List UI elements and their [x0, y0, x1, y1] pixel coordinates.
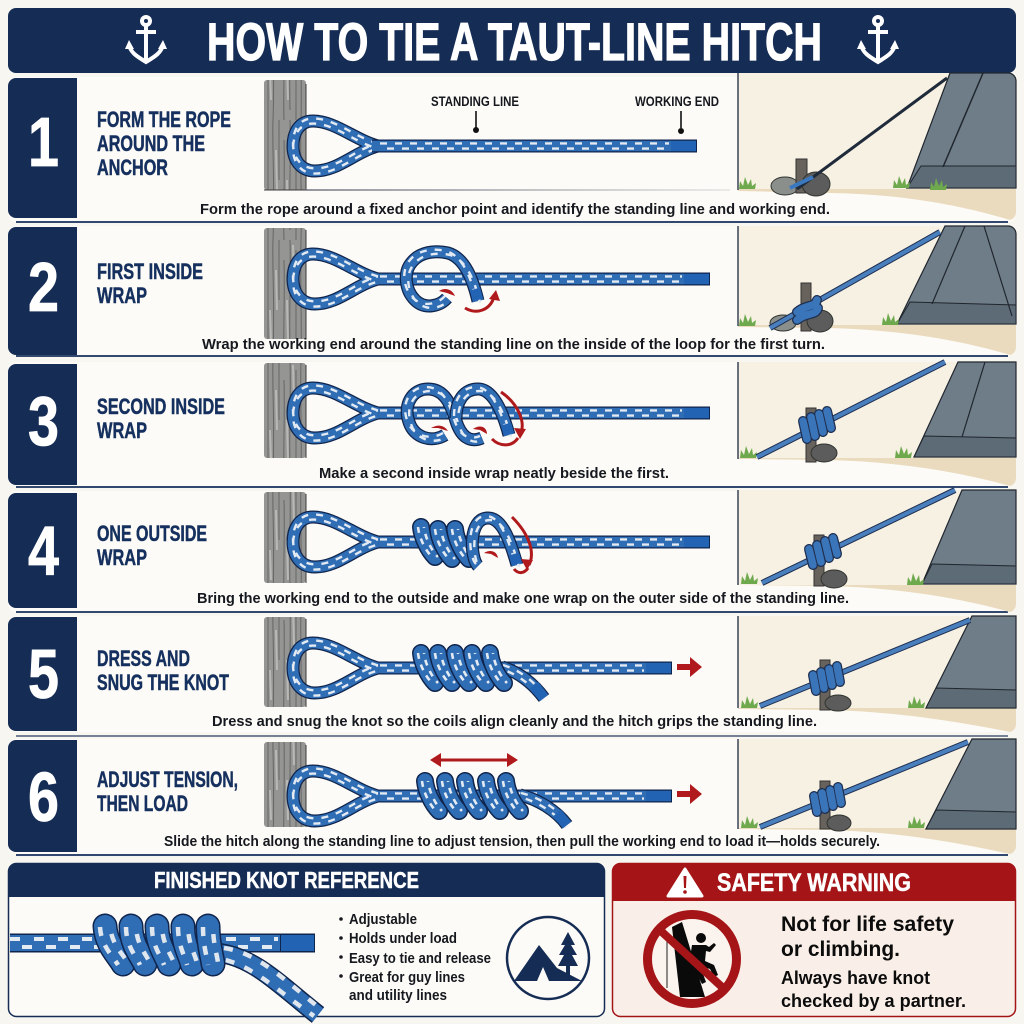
anchor post [264, 742, 306, 827]
step title: THEN LOAD [97, 791, 188, 816]
warning text: Always have knot [781, 967, 930, 988]
step number 6: 6 [28, 758, 59, 836]
label: standing line [431, 94, 519, 133]
step number 2 [8, 227, 77, 355]
panel: step 4 [8, 490, 1016, 612]
warning header [612, 863, 1016, 901]
label: standing line: STANDING LINE [431, 94, 519, 109]
step title [97, 394, 225, 443]
panel: step 5 [8, 616, 1016, 736]
panel: step 3 [8, 362, 1016, 487]
bullet list [339, 911, 491, 1004]
step title: WRAP [97, 418, 147, 443]
scene: tent guy line 5 [738, 616, 1016, 732]
caption: step 5: Dress and snug the knot so the coils align cleanly and the hitch grips the standing line. [212, 714, 817, 730]
step number 5 [8, 617, 77, 731]
caption: step 4: Bring the working end to the outside and make one wrap on the outer side of the standing line. [197, 591, 849, 607]
step number 3: 3 [28, 382, 59, 460]
step title [97, 107, 231, 180]
arrows: outside wrap direction [484, 517, 533, 573]
bullet list: Easy to tie and release [349, 950, 491, 967]
rope: finished knot [10, 925, 322, 1016]
step title [97, 767, 238, 816]
panel header: FINISHED KNOT REFERENCE [154, 867, 419, 893]
heading: main title: HOW TO TIE A TAUT-LINE HITCH [207, 13, 822, 72]
step title: ONE OUTSIDE [97, 521, 207, 546]
step title: SNUG THE KNOT [97, 670, 229, 695]
warning text: Not for life safety [781, 912, 954, 936]
step number 4: 4 [28, 512, 59, 590]
rope: step 4 [293, 514, 710, 570]
panel: step 6 [8, 739, 1016, 855]
rope: step 5 [293, 640, 672, 700]
anchor post [264, 363, 306, 458]
icon: left anchor [125, 17, 167, 62]
caption: step 3: Make a second inside wrap neatly beside the first. [319, 466, 669, 482]
anchor post [264, 492, 306, 583]
anchor post [264, 228, 306, 339]
icon: tent and tree [507, 917, 589, 999]
arrows: second wrap direction [431, 392, 526, 445]
panel: step 2 [8, 226, 1016, 356]
step number 6 [8, 740, 77, 852]
step title [97, 521, 207, 570]
step title: ADJUST TENSION, [97, 767, 238, 792]
panel header [8, 863, 605, 897]
icon: warning triangle [668, 869, 702, 896]
rope: step 6 [293, 768, 672, 827]
arrow: pull right [677, 657, 702, 677]
panel: safety warning [612, 863, 1016, 1016]
step number 4 [8, 493, 77, 608]
step title [97, 259, 203, 308]
panel: step 1 [8, 73, 1016, 222]
scene: tent guy line 6 [738, 739, 1016, 854]
label: working end: WORKING END [635, 94, 719, 109]
bullet list: Great for guy lines [349, 969, 465, 986]
caption: step 1: Form the rope around a fixed anchor point and identify the standing line and working end. [200, 202, 830, 218]
step title: WRAP [97, 545, 147, 570]
arrow: pull right [677, 784, 702, 804]
scene: tent guy line 4 [738, 490, 1016, 612]
label: working end [635, 94, 719, 134]
caption: step 6: Slide the hitch along the standing line to adjust tension, then pull the working end to load it—holds securely. [164, 834, 880, 850]
title banner [8, 8, 1016, 73]
bullet list: Holds under load [349, 930, 457, 947]
step title: FORM THE ROPE [97, 107, 231, 132]
step number 3 [8, 364, 77, 485]
warning text: checked by a partner. [781, 990, 966, 1011]
scene: tent guy line 1 [738, 73, 1016, 220]
step title: DRESS AND [97, 646, 190, 671]
step number 1 [8, 78, 77, 218]
warning text [781, 912, 966, 1011]
scene: tent guy line 3 [738, 362, 1016, 486]
step title: AROUND THE [97, 131, 205, 156]
step title: WRAP [97, 283, 147, 308]
caption: step 2: Wrap the working end around the standing line on the inside of the loop for the first turn. [202, 337, 825, 353]
scene: tent guy line 2 [738, 226, 1016, 355]
step title: SECOND INSIDE [97, 394, 225, 419]
panel: finished knot reference [8, 863, 605, 1016]
icon: right anchor [857, 17, 899, 62]
arrow: slide both ways [430, 753, 518, 767]
bullet list: and utility lines [349, 987, 447, 1004]
icon: no climbing sign [648, 914, 736, 1004]
step number 1: 1 [28, 103, 59, 181]
step title: FIRST INSIDE [97, 259, 203, 284]
step number 2: 2 [28, 248, 59, 326]
arrows: first wrap direction [439, 289, 500, 311]
rope: step 3 [293, 385, 710, 442]
step title [97, 646, 229, 695]
step number 5: 5 [28, 635, 59, 713]
anchor post [264, 80, 730, 190]
step title: ANCHOR [97, 155, 168, 180]
warning text: or climbing. [781, 937, 900, 961]
anchor post [264, 617, 306, 707]
rope: step 1 [293, 118, 697, 174]
bullet list: Adjustable [349, 911, 417, 928]
warning header: SAFETY WARNING [717, 869, 911, 897]
rope: step 2 [293, 250, 710, 308]
